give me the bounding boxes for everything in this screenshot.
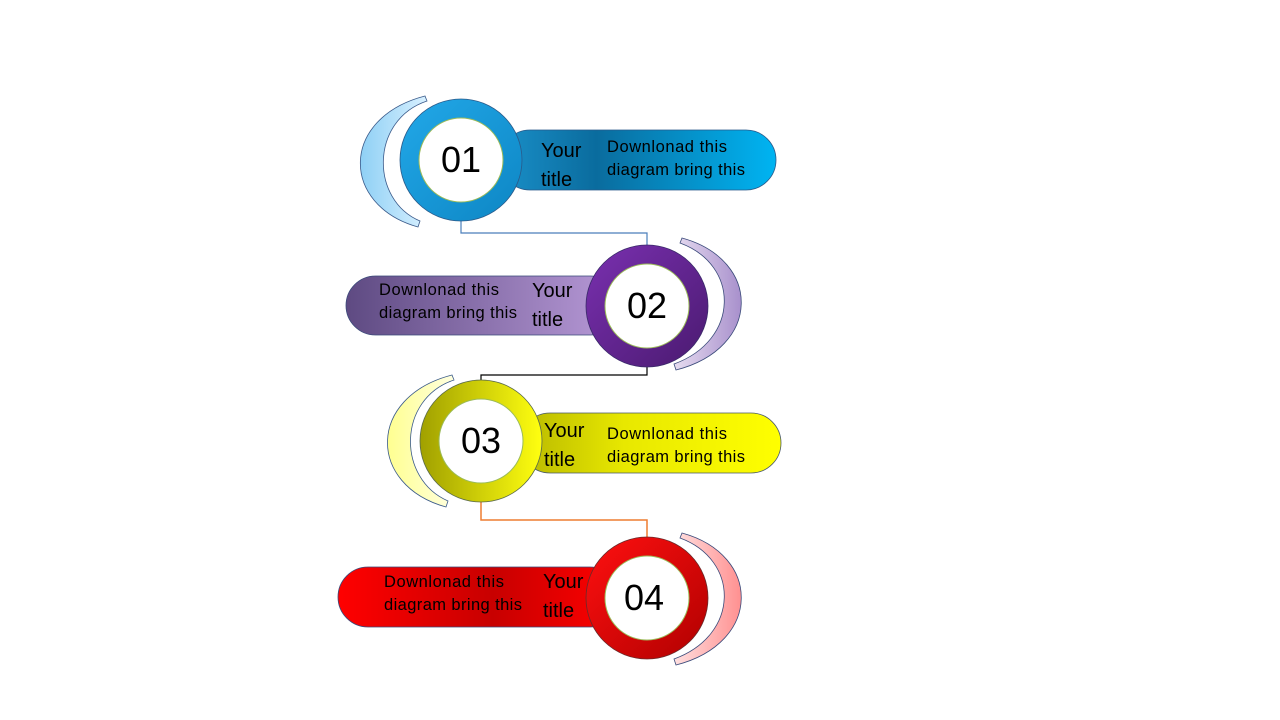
step 04 (338, 533, 741, 665)
title 04: Your (543, 571, 583, 593)
number 02: 02 (627, 285, 667, 326)
bar 02 (346, 276, 620, 335)
bar 04 (338, 567, 620, 627)
ring 03 (420, 380, 542, 502)
title 04: title (543, 600, 574, 622)
ring 01 (400, 99, 522, 221)
desc 01: Downlonad this (607, 138, 727, 156)
desc 03: Downlonad this (607, 425, 727, 443)
step 04: diagram bring this (384, 596, 522, 614)
step 03 (387, 375, 781, 507)
connector 1-2 (461, 219, 647, 248)
step 02 (346, 238, 741, 370)
step 01: diagram bring this (607, 161, 745, 179)
number 01: 01 (441, 139, 481, 180)
ring 04 (586, 537, 708, 659)
number 04: 04 (624, 577, 664, 618)
number 03: 03 (461, 420, 501, 461)
bar 01 (500, 130, 776, 190)
title 02: Your (532, 280, 572, 302)
crescent 04 (674, 533, 741, 665)
title 01: title (541, 169, 572, 191)
ring 02 (586, 245, 708, 367)
title 03: title (544, 449, 575, 471)
crescent 02 (674, 238, 741, 370)
title 02: title (532, 309, 563, 331)
step 01 (360, 96, 776, 227)
crescent 01 (360, 96, 427, 227)
step 02: diagram bring this (379, 304, 517, 322)
title 03: Your (544, 420, 584, 442)
connector 3-4 (481, 502, 647, 540)
bar 03 (520, 413, 781, 473)
connector 2-3 (481, 367, 647, 382)
desc 04: Downlonad this (384, 573, 504, 591)
title 01: Your (541, 140, 581, 162)
crescent 03 (387, 375, 454, 507)
step 03: diagram bring this (607, 448, 745, 466)
desc 02: Downlonad this (379, 281, 499, 299)
